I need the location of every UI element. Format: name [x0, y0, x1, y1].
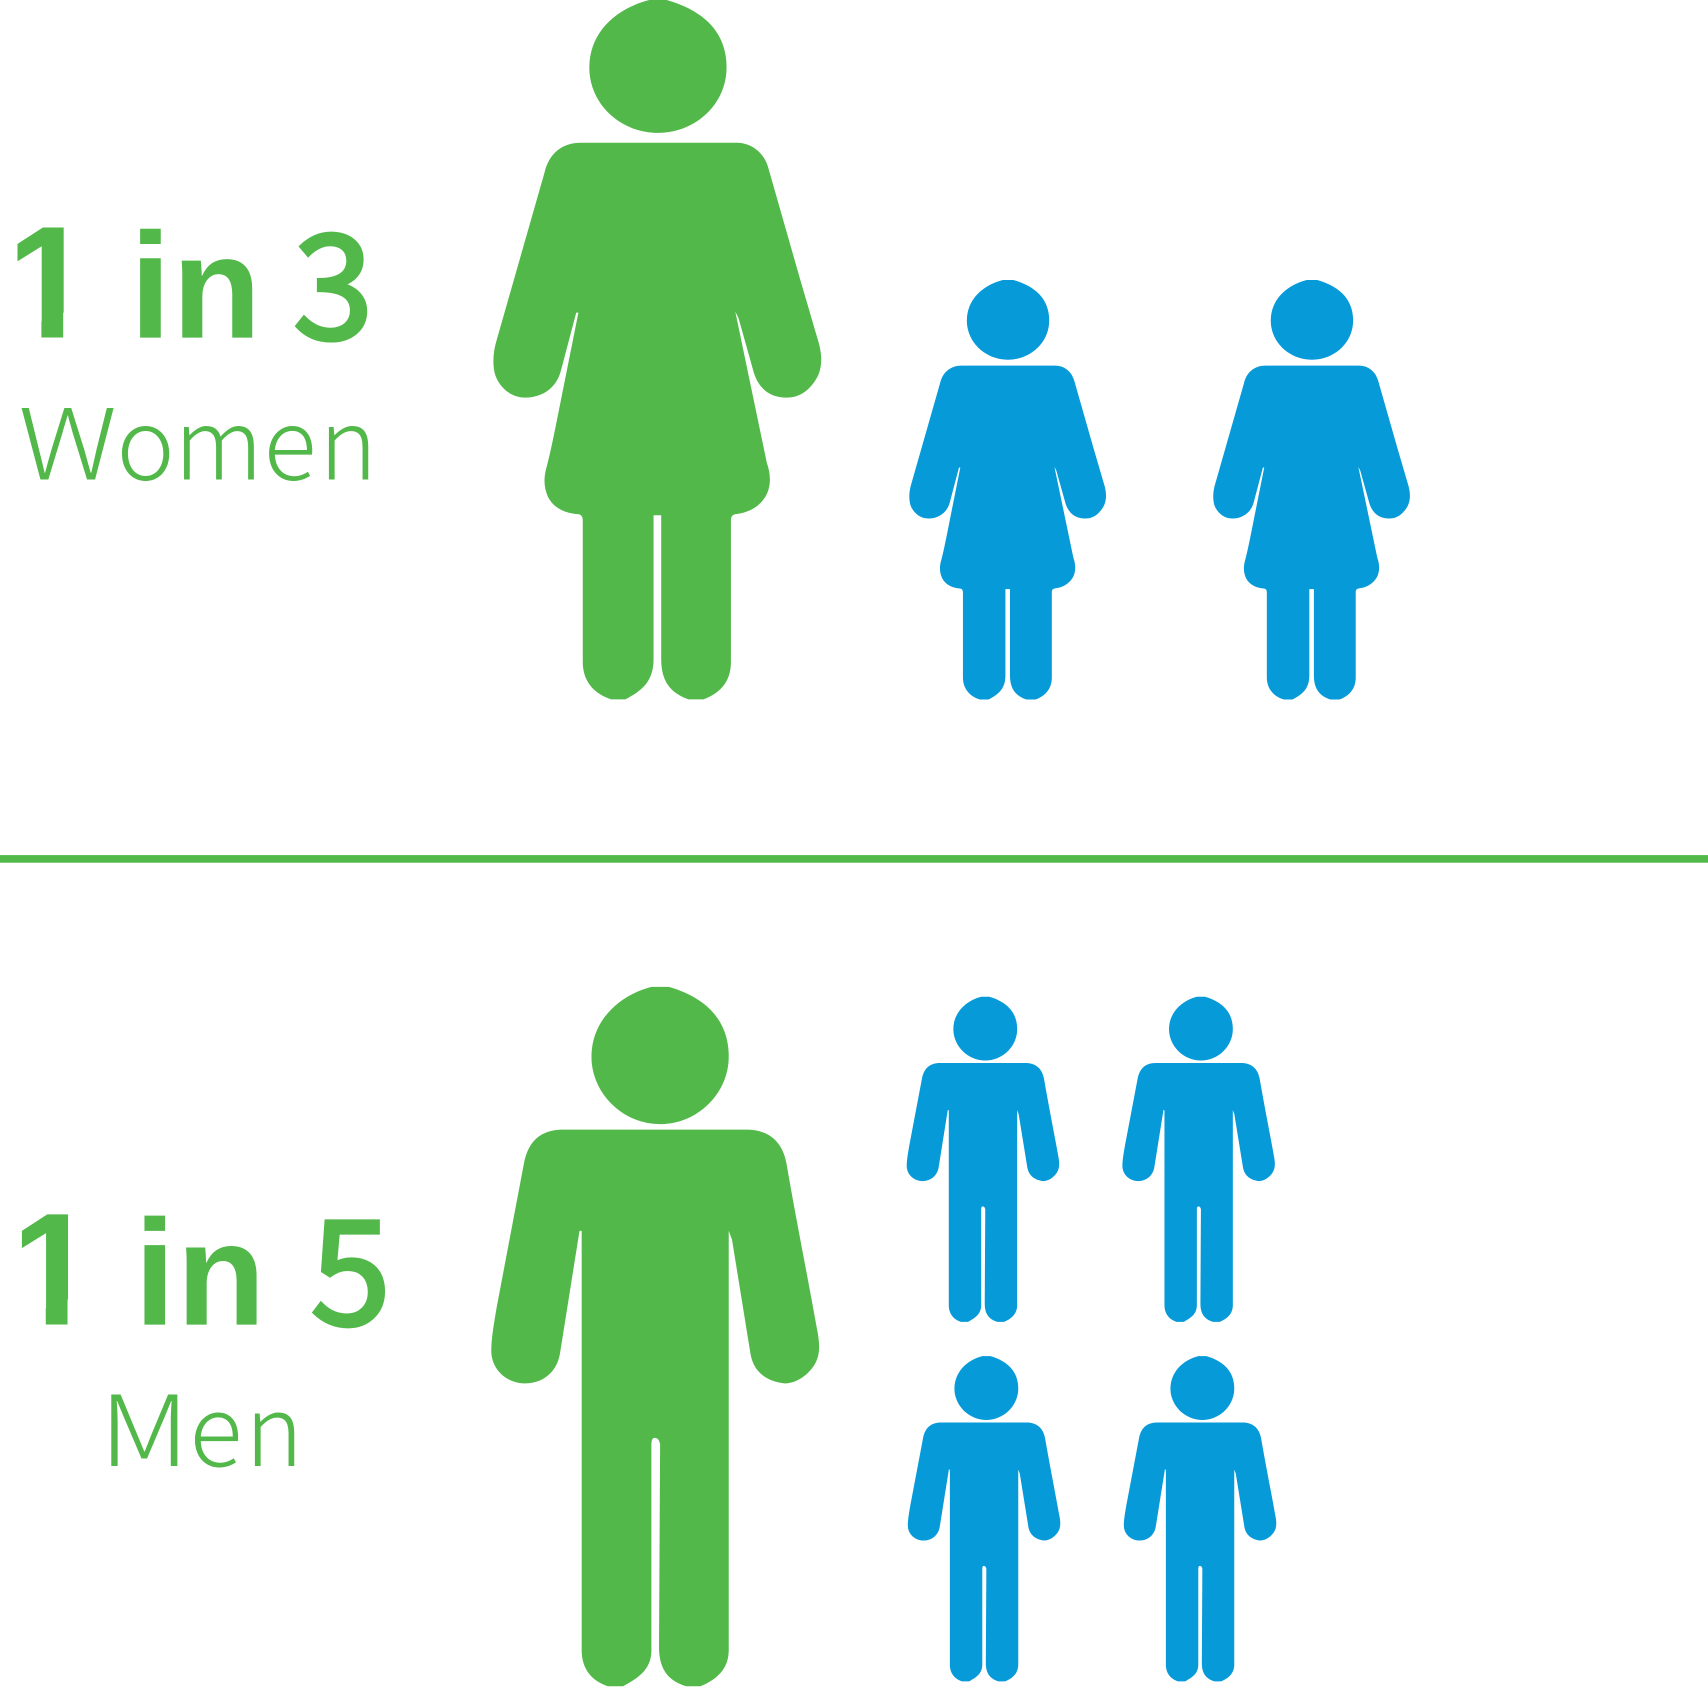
icon: blue woman 1 — [909, 280, 1106, 700]
label: Men: M — [99, 1353, 190, 1495]
statistic: 1 in 5: 5 — [310, 1157, 391, 1367]
icon: blue man bottom right — [1124, 1356, 1276, 1681]
statistic: 1 in 5 — [22, 1214, 386, 1328]
icon: blue man bottom left — [908, 1356, 1060, 1681]
icon: blue man top right — [1122, 997, 1275, 1322]
statistic: 1 in 5: 1 — [9, 1180, 98, 1359]
icon: blue man top left — [907, 997, 1059, 1322]
label: Women: omen — [117, 366, 377, 508]
statistic: 1 in 3: 3 — [293, 171, 373, 381]
icon: blue woman 2 — [1213, 280, 1410, 700]
statistic: 1 in 3: i — [130, 202, 171, 370]
statistic: 1 in 3 — [18, 228, 368, 342]
label: Women: W — [18, 366, 117, 508]
divider line — [0, 855, 1708, 863]
label: Men — [99, 1353, 303, 1495]
icon: large green woman — [493, 0, 821, 699]
statistic: 1 in 3: n — [172, 206, 261, 369]
label: Men: en — [190, 1353, 303, 1495]
statistic: 1 in 5: i — [134, 1189, 176, 1357]
icon: large green man — [491, 987, 819, 1686]
statistic: 1 in 3: 1 — [4, 193, 93, 372]
statistic: 1 in 5: n — [176, 1193, 266, 1356]
